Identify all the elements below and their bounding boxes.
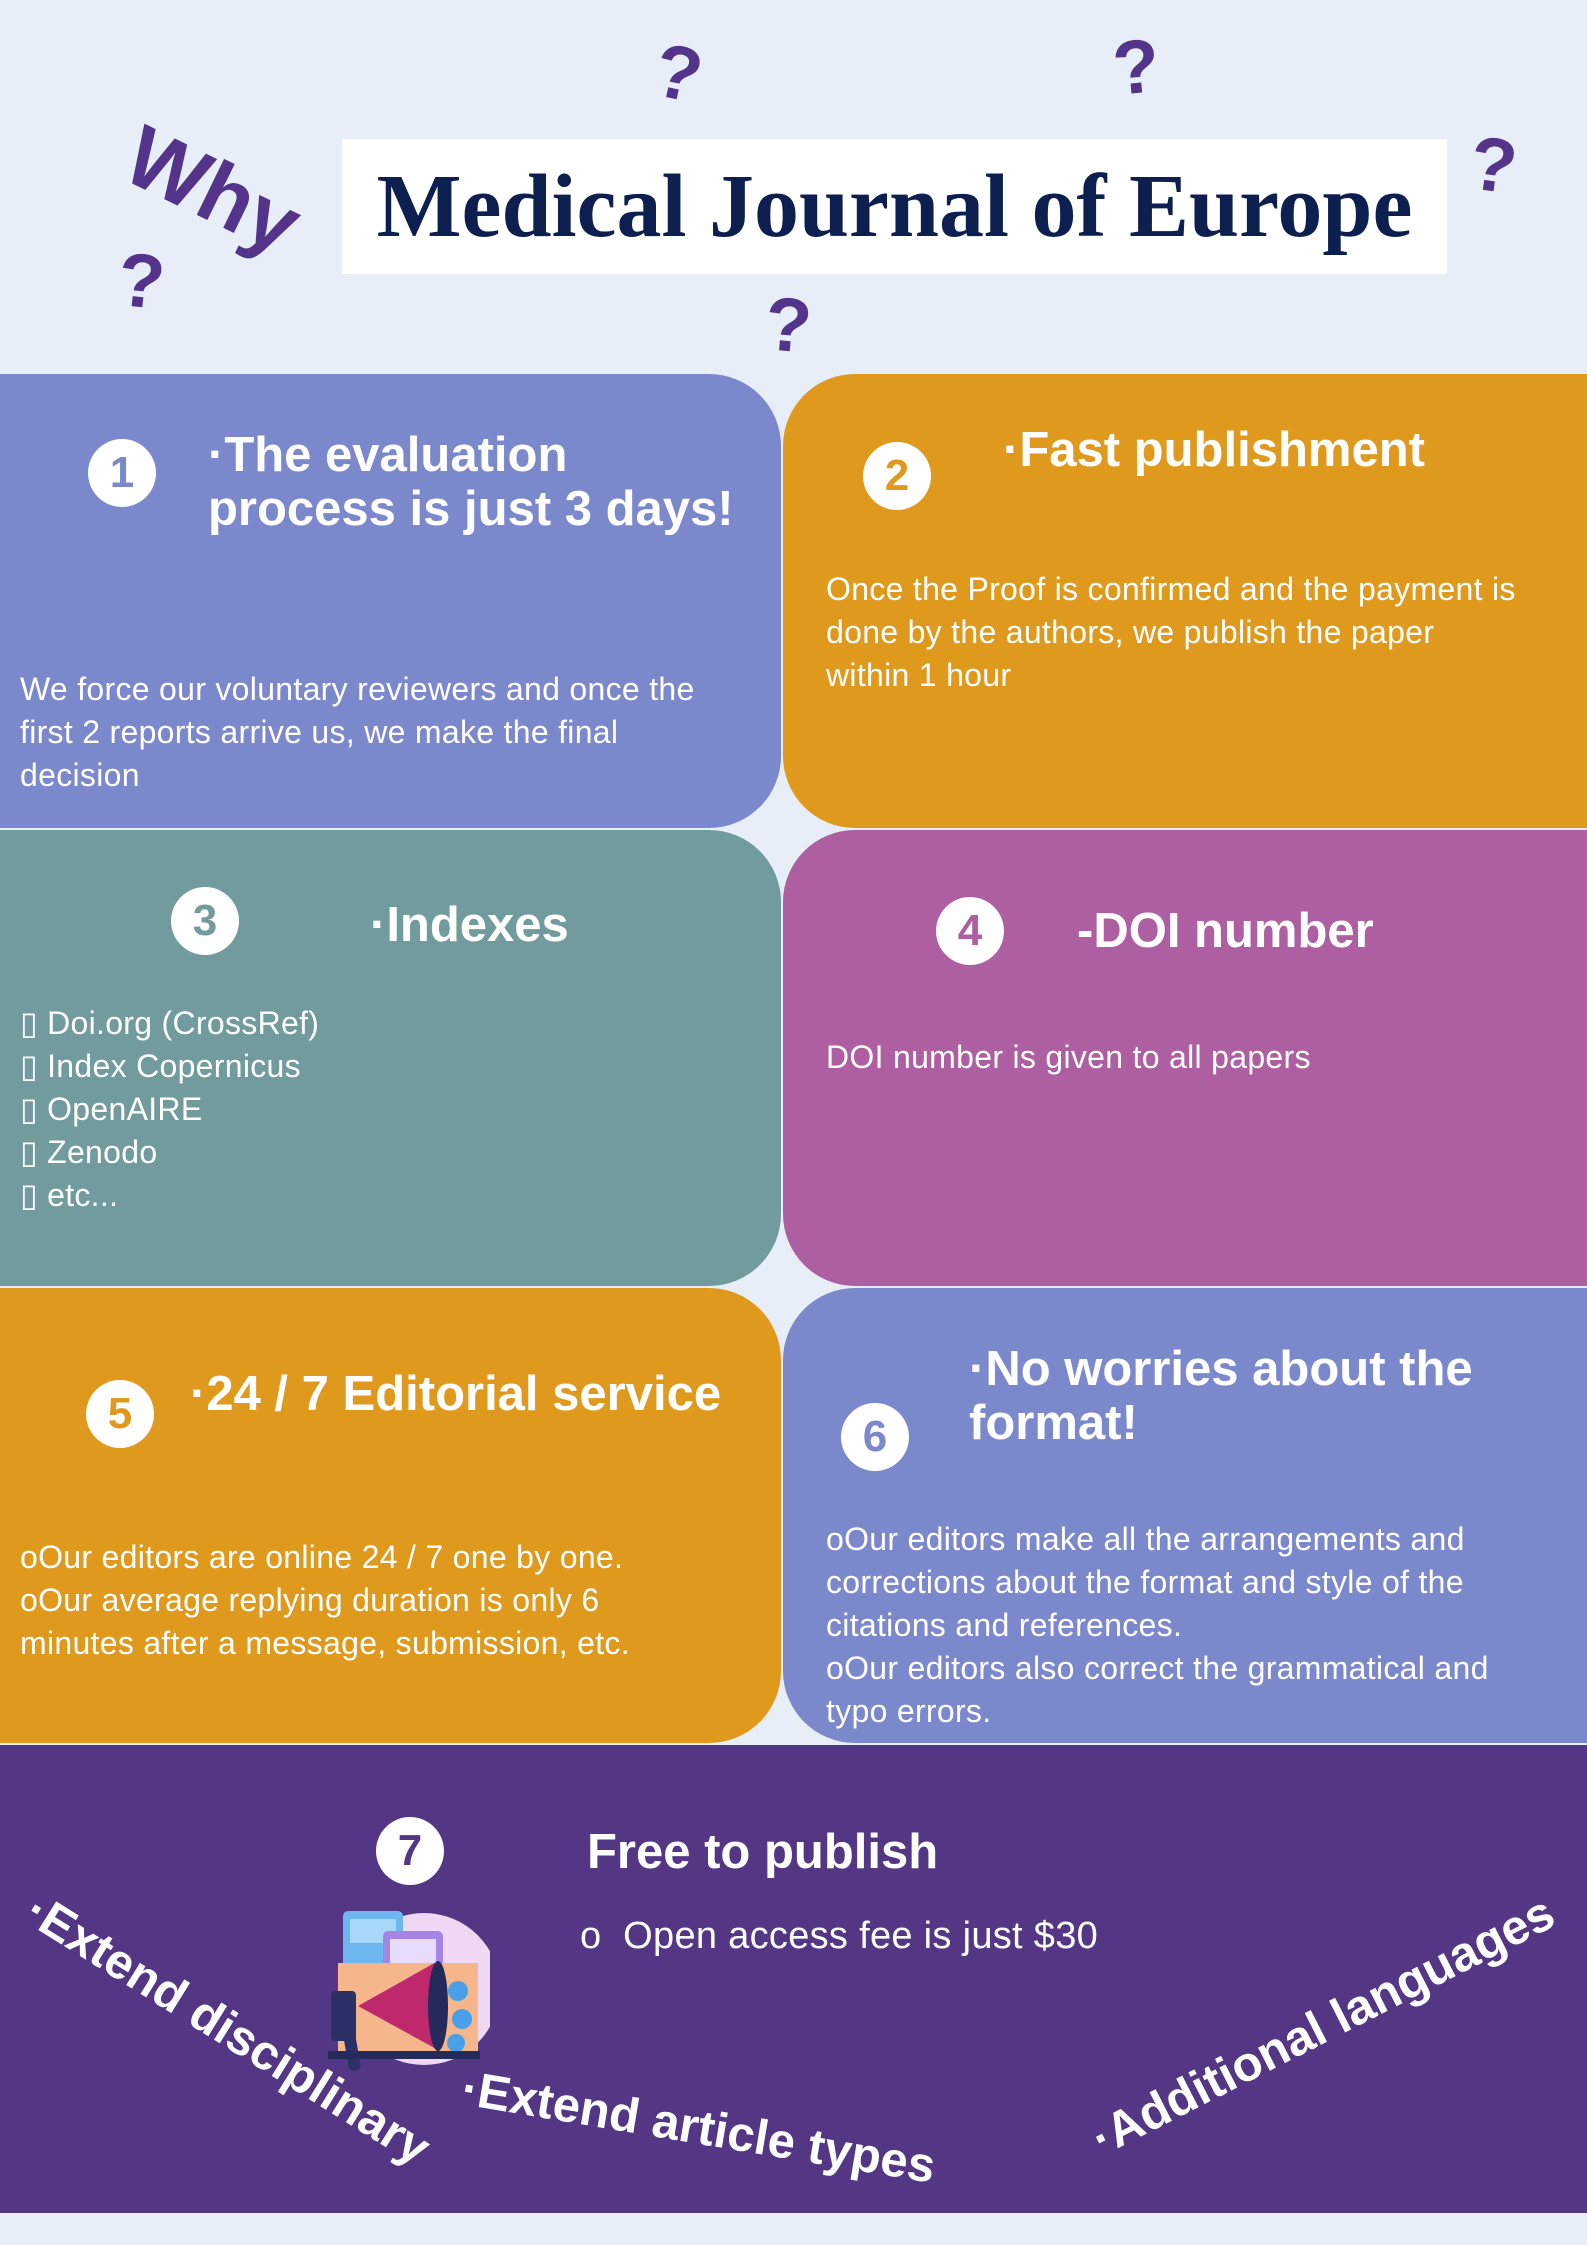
heading 1 [208, 428, 734, 536]
body 5: oOur editors are online 24 / 7 one by one. [20, 1539, 623, 1575]
rotated label: extend disciplinary: ·Extend disciplinary [16, 1883, 439, 2176]
heading 6: format! [969, 1396, 1138, 1450]
heading 3: ·Indexes [370, 898, 569, 952]
index list: ▯ OpenAIRE [20, 1091, 202, 1127]
body 1: first 2 reports arrive us, we make the final [20, 714, 618, 750]
heading 7: Free to publish [587, 1825, 938, 1879]
number 6: 6 [863, 1412, 887, 1461]
body 6: typo errors. [826, 1693, 991, 1729]
icon: megaphone illustration [328, 1911, 490, 2071]
question mark: ? [114, 237, 169, 326]
panel 5: editorial service [0, 1288, 781, 1743]
heading 4: -DOI number [1077, 904, 1374, 958]
index list: ▯ Index Copernicus [20, 1048, 301, 1084]
index list [20, 1005, 319, 1213]
heading 1: ·The evaluation [208, 428, 567, 482]
heading 2: ·Fast publishment [1003, 423, 1425, 477]
panel 6: format [783, 1288, 1587, 1743]
body 4: DOI number is given to all papers [826, 1039, 1311, 1075]
number 2 [863, 442, 931, 510]
heading 6: ·No worries about the [969, 1342, 1473, 1396]
number 3: 3 [193, 896, 217, 945]
body 1: We force our voluntary reviewers and once the [20, 671, 695, 707]
panel 1: evaluation [0, 374, 781, 828]
question mark: ? [761, 281, 815, 370]
number 7: 7 [398, 1826, 422, 1875]
body 1: decision [20, 757, 140, 793]
title box [342, 139, 1447, 274]
heading: Why: Why [110, 108, 315, 273]
number 3 [171, 887, 239, 955]
body 1 [20, 671, 695, 793]
body 6: corrections about the format and style of the [826, 1564, 1464, 1600]
body 6 [826, 1521, 1489, 1729]
body 6: oOur editors make all the arrangements and [826, 1521, 1465, 1557]
number 7 [376, 1817, 444, 1885]
body 2: Once the Proof is confirmed and the payment is [826, 571, 1516, 607]
panel 7: free to publish [0, 1745, 1587, 2213]
question mark: ? [1109, 23, 1163, 112]
title box: Medical Journal of Europe [377, 157, 1412, 256]
panel 3: indexes [0, 830, 781, 1286]
heading 1: process is just 3 days! [208, 482, 734, 536]
body 2: done by the authors, we publish the paper [826, 614, 1434, 650]
body 5: oOur average replying duration is only 6 [20, 1582, 599, 1618]
rotated label: extend article types: ·Extend article types [458, 2061, 939, 2194]
number 1 [88, 439, 156, 507]
panel 2: fast publishment [783, 374, 1587, 828]
body 2: within 1 hour [826, 657, 1011, 693]
number 6 [841, 1403, 909, 1471]
index list: ▯ Doi.org (CrossRef) [20, 1005, 319, 1041]
body 5: minutes after a message, submission, etc. [20, 1625, 630, 1661]
question mark: ? [647, 27, 710, 120]
rotated label: additional languages: ·Additional languages [1083, 1886, 1563, 2166]
number 5: 5 [108, 1389, 132, 1438]
heading 6 [969, 1342, 1473, 1450]
body 5 [20, 1539, 630, 1661]
number 2: 2 [885, 451, 909, 500]
question mark: ? [1464, 120, 1522, 211]
number 4 [936, 897, 1004, 965]
body 7: o Open access fee is just $30 [580, 1915, 1098, 1957]
number 5 [86, 1380, 154, 1448]
index list: ▯ etc... [20, 1177, 118, 1213]
number 1: 1 [110, 448, 134, 497]
body 6: oOur editors also correct the grammatical and [826, 1650, 1489, 1686]
number 4: 4 [958, 906, 982, 955]
index list: ▯ Zenodo [20, 1134, 157, 1170]
heading 5: ·24 / 7 Editorial service [190, 1367, 721, 1421]
panel 4: DOI [783, 830, 1587, 1286]
body 2 [826, 571, 1516, 693]
body 6: citations and references. [826, 1607, 1182, 1643]
